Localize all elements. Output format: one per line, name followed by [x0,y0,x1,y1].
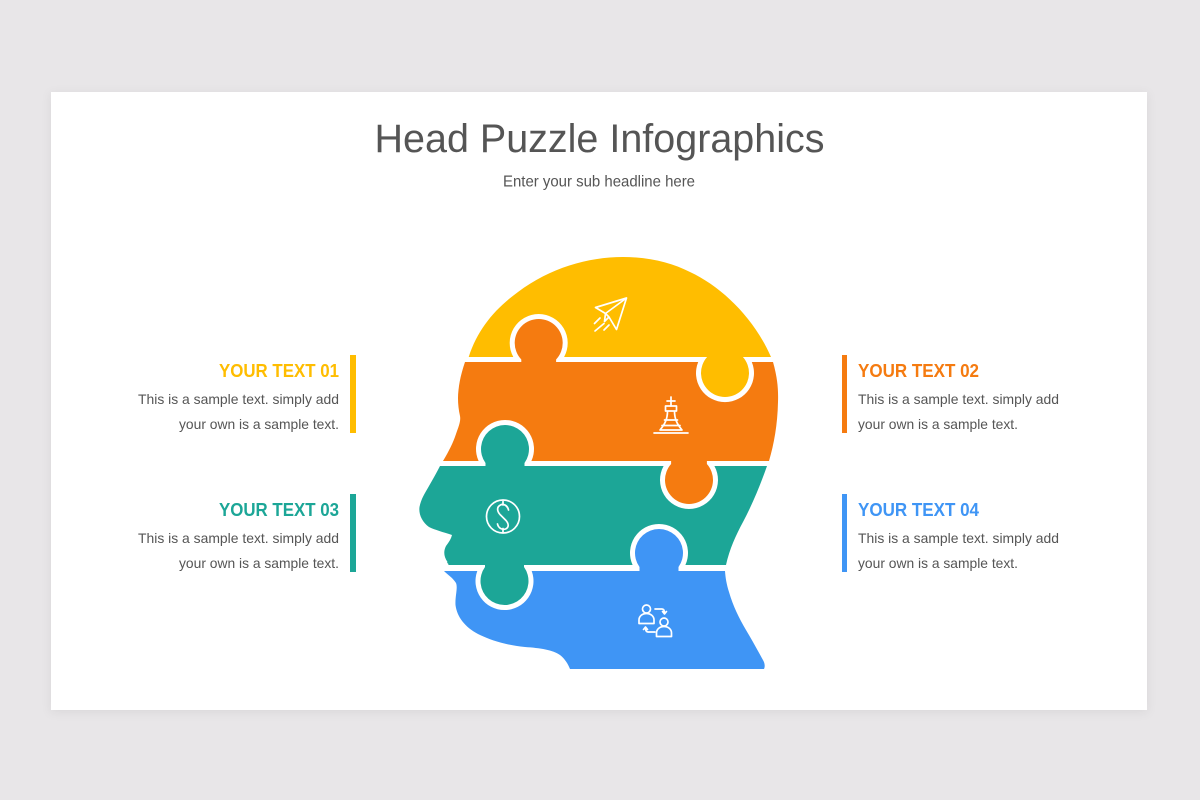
icon: dollar coin [486,500,520,533]
callout: your text 04: YOUR TEXT 04 [858,500,979,520]
icon: chess king [654,397,688,433]
callout: your text 04 [842,494,1059,572]
callout: your text 02: your own is a sample text. [858,416,1018,432]
callout: your text 01: This is a sample text. simply add [138,391,339,407]
callout: your text 01: YOUR TEXT 01 [219,361,339,381]
puzzle piece: orange forehead [443,319,778,504]
icon: exchanging people [639,605,672,636]
callout: your text 02: YOUR TEXT 02 [858,361,979,381]
callout: your text 03: This is a sample text. simply add [138,530,339,546]
callout: your text 01: your own is a sample text. [179,416,339,432]
callout: your text 01 [138,355,356,433]
panel: white slide card [51,92,1147,710]
icon: paper plane [594,298,626,331]
callout: your text 03: YOUR TEXT 03 [219,500,339,520]
puzzle piece: blue jaw and neck [444,529,765,669]
puzzle piece: yellow crown [469,257,771,397]
head puzzle diagram [419,257,778,669]
subtitle: Enter your sub headline here [503,174,695,190]
callout: your text 02 [842,355,1059,433]
callout: your text 03 [138,494,356,572]
callout: your text 03: your own is a sample text. [179,555,339,571]
callout: your text 02: This is a sample text. simply add [858,391,1059,407]
puzzle piece: teal face [419,425,767,605]
title: Head Puzzle Infographics [374,117,824,161]
callout: your text 04: your own is a sample text. [858,555,1018,571]
callout: your text 04: This is a sample text. simply add [858,530,1059,546]
